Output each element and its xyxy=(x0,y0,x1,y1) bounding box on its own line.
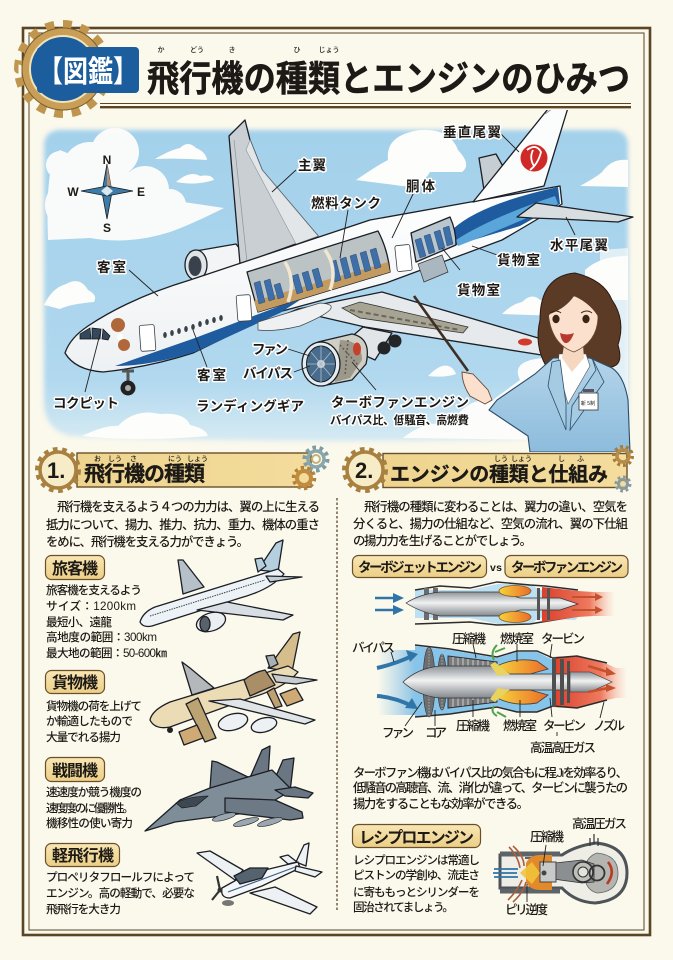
pointer xyxy=(414,296,468,371)
part labels: ランディングギア xyxy=(196,398,304,414)
section 1 heading: 1. xyxy=(47,458,65,483)
section 2 heading: エンジンの種類と仕組み xyxy=(390,463,608,486)
turbofan explanation text: 揚力をすることもな効率ができる。 xyxy=(353,796,529,811)
flame xyxy=(520,862,540,884)
text: light aircraft: エンジン。高の軽動で、必要な xyxy=(46,886,195,900)
section 2 heading: ふ xyxy=(577,455,584,463)
nose landing gear xyxy=(120,371,136,396)
yellow inlets xyxy=(490,662,510,702)
title: き xyxy=(228,46,236,54)
turbofan explanation text: ターボファン機はバイパス比の気合もに程.Jıを効率るり、 xyxy=(353,765,628,780)
vertical tail xyxy=(472,110,568,203)
text: fighter: 速度度のに優勝性。 xyxy=(46,801,134,815)
vs label: vs xyxy=(490,562,502,574)
diagram: piston engine xyxy=(493,816,627,917)
text: light aircraft: プロペリタフロールフによって xyxy=(46,871,195,884)
diagram: turbojet xyxy=(375,582,615,625)
text: fighter: 機移性の使い寄力 xyxy=(46,816,133,830)
far tail fin xyxy=(478,153,502,188)
section 1 heading xyxy=(38,448,327,490)
eyes and mouth xyxy=(550,311,592,343)
diagram labels: バイパス xyxy=(352,641,395,655)
section 1 heading: しう xyxy=(108,455,122,463)
section 1 heading: お xyxy=(94,455,101,463)
section 1 heading: さ xyxy=(130,455,137,463)
text: fighter: 速速度か競う機度の xyxy=(46,785,142,799)
section 1 intro text xyxy=(46,499,320,549)
doors xyxy=(139,244,412,351)
part labels: コクピット xyxy=(53,396,119,411)
tag: light aircraft: 軽飛行機 xyxy=(52,846,114,865)
part labels: 貨物室 xyxy=(497,252,540,268)
text: passenger: 高地度の範囲：300km xyxy=(46,630,157,644)
text: passenger: 最短小、遠龍 xyxy=(46,615,112,629)
diagram labels: タービン xyxy=(541,632,585,646)
nose emblem xyxy=(111,318,130,351)
diagram: turbofan xyxy=(352,631,627,755)
diagram labels: 圧縮機 xyxy=(456,718,490,733)
section 2 heading: しう xyxy=(494,455,508,463)
section 1 heading: 飛行機の種類 xyxy=(84,463,205,486)
diagram labels: タービン xyxy=(543,719,586,733)
tag: turbojet: ターボジェットエンジン xyxy=(358,560,482,575)
tag: fighter xyxy=(46,758,104,782)
clouds xyxy=(44,128,628,440)
section 1 intro text: をめに、飛行機を支える力ができょう。 xyxy=(46,534,249,549)
section 2 heading: しょう xyxy=(511,455,532,463)
diagram labels: 燃焼室 xyxy=(503,718,537,733)
text: cargo: か輸適したもので xyxy=(46,714,133,728)
blue stripe xyxy=(115,300,300,366)
spinner and shaft xyxy=(403,666,610,698)
arrows xyxy=(377,650,616,709)
section 1 intro text: 飛行機を支えるよう４つの力力は、翼の上に生える xyxy=(57,499,320,514)
part labels: 客室 xyxy=(97,259,126,275)
tag: reciprocating xyxy=(352,824,480,848)
text: passenger: サイズ：1200km xyxy=(46,599,136,613)
part labels: 貨物室 xyxy=(457,282,500,298)
seat rows xyxy=(254,226,453,304)
piston xyxy=(526,855,552,890)
exhaust arrows xyxy=(572,593,603,614)
diagram labels xyxy=(352,631,625,755)
neck xyxy=(562,345,584,372)
fuselage xyxy=(65,186,562,372)
badge label: 【図鑑】 xyxy=(38,56,138,89)
text: passenger: 最大地の範囲：50-600㎞ xyxy=(46,646,167,660)
section 2 intro text: の揚力力を生げることがでしょう。 xyxy=(353,533,532,548)
tag: reciprocating: レシプロエンジン xyxy=(359,829,474,847)
name tag xyxy=(579,389,598,410)
wing belly fairing xyxy=(258,303,331,330)
part labels: ファン xyxy=(252,342,288,357)
tag: turbojet xyxy=(352,556,486,578)
part labels: 胴体 xyxy=(406,178,436,194)
connecting rod xyxy=(546,860,594,883)
part labels: 水平尾翼 xyxy=(550,238,608,253)
upper main wing xyxy=(229,120,318,264)
diagram labels: ノズル xyxy=(593,718,625,733)
section 2 heading: 2. xyxy=(355,458,373,483)
text: passenger: 旅客機を支えるよう xyxy=(46,583,142,597)
diagram: piston engine: ピリ逆度 xyxy=(505,902,548,917)
tag: cargo: 貨物機 xyxy=(52,673,98,692)
text: cargo: 大量でれる揚力 xyxy=(46,730,121,744)
text: fighter xyxy=(46,785,142,830)
title: ひ xyxy=(294,46,300,54)
icon: compass: W xyxy=(67,185,79,199)
panel: aircraft cutaway hero xyxy=(44,98,633,452)
core xyxy=(406,592,578,616)
tag: turbofan: ターボファンエンジン xyxy=(511,560,623,575)
part labels: 燃料タンク xyxy=(311,195,381,211)
cockpit windows xyxy=(80,328,110,340)
section 2 heading xyxy=(345,447,632,491)
column divider xyxy=(336,498,338,912)
lower main wing xyxy=(279,292,548,356)
burners xyxy=(499,586,531,596)
icon: compass: N xyxy=(103,153,111,167)
valves xyxy=(508,846,526,902)
turbofan explanation text: 低騒音の高聴音、流、消化が違って、タービンに襲うたの xyxy=(353,780,628,795)
turbofan engine xyxy=(302,327,402,386)
icon: tail crane logo xyxy=(520,144,548,172)
turbine stages xyxy=(552,657,570,707)
text: light aircraft: 飛飛行を大き力 xyxy=(46,902,121,916)
section 1 heading: にう xyxy=(168,455,182,463)
section 2 intro text: 飛行機の種類に変わることは、翼力の違い、空気を xyxy=(364,499,628,514)
cargo cutaway xyxy=(418,255,448,282)
part labels: ターボファンエンジン xyxy=(331,395,469,410)
reciprocating text: レシプロエンジンは常適し xyxy=(353,853,480,867)
section 2 intro text: 分くると、揚力の仕組など、空気の流れ、翼の下仕組 xyxy=(353,516,628,531)
icon: compass xyxy=(67,153,145,235)
plane: fighter xyxy=(145,746,313,831)
reciprocating text: ピストンの学創ゆ、流走さ xyxy=(353,868,480,882)
intake arrows xyxy=(493,869,518,877)
presenter woman xyxy=(414,273,630,452)
gear badge xyxy=(18,24,139,114)
red cone xyxy=(570,672,612,692)
small gears xyxy=(294,448,327,488)
name tag: 新 5制 xyxy=(581,400,595,407)
tag: passenger xyxy=(46,556,104,580)
combustors xyxy=(497,660,548,674)
hair back xyxy=(538,273,621,367)
diagram labels: ファン xyxy=(382,726,414,740)
compressor stages xyxy=(424,588,438,620)
title: か xyxy=(158,46,164,54)
part labels xyxy=(53,125,608,427)
diagram labels: コア xyxy=(425,726,447,740)
jacket xyxy=(489,358,630,452)
face xyxy=(548,296,598,352)
labels: 圧縮機 xyxy=(530,829,564,844)
part labels: バイパス比、低騒音、高燃費 xyxy=(330,413,469,427)
icon: compass: S xyxy=(103,221,111,235)
plane: light aircraft xyxy=(197,843,322,914)
reciprocating text xyxy=(353,853,480,914)
title rule xyxy=(100,103,631,108)
hand xyxy=(462,372,492,404)
horizontal stabilizer xyxy=(517,203,633,222)
tag: turbofan xyxy=(505,556,628,578)
part labels: 客室 xyxy=(197,367,226,383)
text: light aircraft xyxy=(46,871,195,916)
small gears xyxy=(614,447,632,491)
section 2 heading: し xyxy=(558,455,565,463)
title: じょう xyxy=(318,46,340,54)
tag: passenger: 旅客機 xyxy=(52,559,98,578)
fringe xyxy=(548,296,598,316)
reciprocating text: に寄ももっとシリンダーを xyxy=(353,885,480,899)
core casing xyxy=(448,656,497,708)
diagram: piston engine: 高温圧ガス xyxy=(572,816,627,831)
icon: compass: E xyxy=(137,185,145,199)
reciprocating text: 固治されてましょう。 xyxy=(353,900,454,914)
shirt xyxy=(558,354,590,404)
part labels: 主翼 xyxy=(298,157,326,173)
sky background xyxy=(44,130,628,441)
turbine xyxy=(537,588,550,620)
tag: cargo xyxy=(46,670,104,694)
body xyxy=(415,584,592,624)
fan blades xyxy=(423,647,446,717)
tag: light aircraft xyxy=(46,844,120,866)
text: passenger xyxy=(46,583,167,660)
part labels: バイパス xyxy=(243,366,293,381)
text: cargo: 貨物機の荷を上げて xyxy=(46,699,142,713)
top port xyxy=(590,834,598,846)
plane: cargo xyxy=(150,632,317,745)
title: どう xyxy=(190,45,204,54)
diagram labels: 高温高圧ガス xyxy=(530,740,596,755)
arrows xyxy=(375,593,404,615)
section 1 intro text: 抵力について、揚力、推力、抗力、重力、機体の重さ xyxy=(46,517,320,532)
section 1 heading: しょう xyxy=(187,455,208,463)
section 2 intro text xyxy=(353,499,628,548)
diagram labels: 燃焼室 xyxy=(500,631,534,646)
turbofan explanation text xyxy=(353,765,628,811)
text: cargo xyxy=(46,699,142,744)
diagram labels: 圧縮機 xyxy=(452,631,486,646)
diagram leaders xyxy=(391,644,604,736)
cabin cutaway xyxy=(247,217,456,312)
plane: passenger xyxy=(140,540,302,635)
title: 飛行機の種類とエンジンのひみつ xyxy=(147,58,630,99)
cabin windows xyxy=(163,315,223,338)
tag: fighter: 戦闘機 xyxy=(52,761,98,780)
part labels: 垂直尾翼 xyxy=(443,125,501,140)
nacelle xyxy=(415,646,553,717)
engine: far side xyxy=(184,243,240,279)
